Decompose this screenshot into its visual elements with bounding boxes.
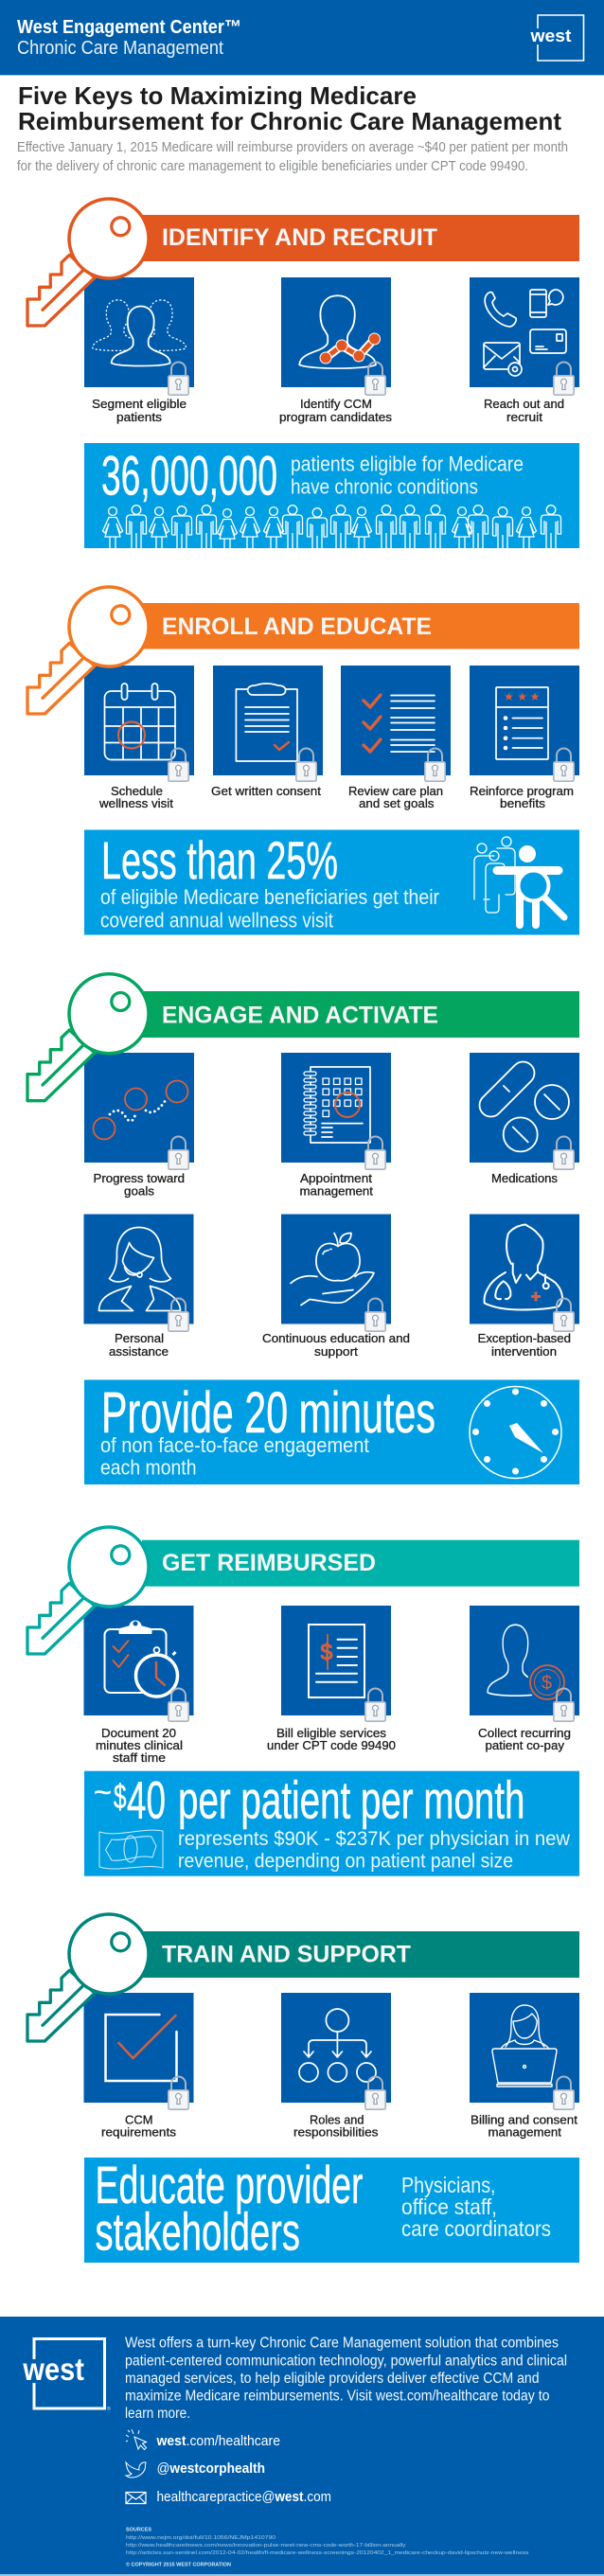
link: twitter: @westcorphealth xyxy=(157,2461,265,2477)
main title: Five Keys to Maximizing Medicare xyxy=(18,81,417,110)
icon: money bill xyxy=(99,1830,163,1869)
item labels: Continuous education and xyxy=(262,1331,410,1345)
west logo: west xyxy=(529,26,572,45)
stat callout: educate provider stakeholders: office staff, xyxy=(401,2194,497,2219)
icon: segment patients xyxy=(84,277,194,395)
icon: envelope xyxy=(126,2492,146,2503)
icon: woman at laptop xyxy=(470,1993,579,2109)
stat callout: 36,000,000: have chronic conditions xyxy=(291,475,478,498)
stat callout: 36,000,000: patients eligible for Medicare xyxy=(291,453,524,475)
footer west logo: west xyxy=(23,2352,84,2387)
item labels: Collect recurring xyxy=(478,1726,571,1740)
stat callout: provide 20 minutes xyxy=(84,1380,579,1484)
icon: appointment notebook xyxy=(281,1053,391,1169)
stat callout: less than 25%: covered annual wellness visit xyxy=(100,909,333,932)
item labels: Schedule xyxy=(111,784,163,798)
item labels: Segment eligible xyxy=(92,397,187,411)
item labels: wellness visit xyxy=(98,796,173,810)
section banner xyxy=(142,215,579,261)
item labels: benefits xyxy=(500,796,546,810)
item labels: Bill eligible services xyxy=(276,1726,387,1740)
sources: http://articles.sun-sentinel.com/2012-04-02/health/fl-medicare-wellness-screenings-20120402_1_medicare-checkup-david-lipschutz-new-wellness xyxy=(126,2550,529,2556)
icon: bill xyxy=(281,1606,391,1721)
item labels: responsibilities xyxy=(293,2124,379,2140)
item labels xyxy=(96,1726,571,1765)
stat callout: ~$40 per patient per month: 40 xyxy=(127,1770,166,1829)
stat callout: educate provider stakeholders: Physicians, xyxy=(401,2173,496,2197)
stat callout: 36,000,000: 36,000,000 xyxy=(101,445,277,507)
icon: program benefits sheet xyxy=(470,666,579,781)
link: website: west.com/healthcare xyxy=(156,2433,280,2449)
panel: get reimbursed xyxy=(27,1527,579,1876)
west logo xyxy=(529,15,583,61)
sources: http://www.nejm.org/doi/full/10.1056/NEJMp1410790 xyxy=(126,2535,275,2541)
item labels xyxy=(98,784,574,810)
sources: http://www.healthcareitnews.com/news/innovation-pulse-meet-new-cms-code-worth-17-billion-annually xyxy=(126,2543,406,2549)
item labels: support xyxy=(314,1344,358,1359)
people row xyxy=(102,506,560,551)
icon: org chart xyxy=(281,1993,391,2109)
icon: checkbox requirements xyxy=(83,1993,193,2109)
item labels: recruit xyxy=(506,410,542,424)
icon: twitter bird xyxy=(126,2462,146,2478)
section banner xyxy=(142,1540,579,1587)
item labels: CCM xyxy=(125,2113,153,2126)
key icon xyxy=(27,199,149,326)
stat callout: ~$40 per patient per month: ~ xyxy=(94,1777,112,1808)
item labels: Identify CCM xyxy=(300,397,372,411)
icon: reach out channels xyxy=(470,277,579,395)
item labels: management xyxy=(299,1183,373,1199)
panel: enroll and educate xyxy=(27,587,579,935)
item labels: Progress toward xyxy=(93,1171,185,1185)
section banner xyxy=(142,603,579,649)
panel: identify and recruit xyxy=(27,199,579,551)
item labels: assistance xyxy=(109,1344,169,1359)
stat callout: 36,000,000 xyxy=(84,443,579,551)
header title: West Engagement Center™ xyxy=(17,17,241,38)
key icon xyxy=(27,1527,149,1654)
footer paragraph: maximize Medicare reimbursements. Visit west.com/healthcare today to xyxy=(125,2388,549,2405)
stat callout: ~$40 per patient per month: $ xyxy=(114,1777,127,1816)
item labels: patients xyxy=(116,410,163,424)
intro text: Effective January 1, 2015 Medicare will reimburse providers on average ~$40 per patient per month xyxy=(17,140,568,155)
header band xyxy=(0,0,604,76)
link: email: healthcarepractice@west.com xyxy=(157,2489,331,2505)
item labels xyxy=(93,1171,571,1359)
footer west logo: ® xyxy=(107,2406,111,2412)
item labels: Medications xyxy=(491,1171,558,1185)
stat callout: educate provider stakeholders: Educate provider xyxy=(95,2155,364,2214)
stat callout: less than 25%: Less than 25% xyxy=(101,830,338,890)
item labels: staff time xyxy=(113,1750,166,1765)
icon: bill: $ xyxy=(320,1639,333,1665)
stat callout: less than 25%: of eligible Medicare beneficiaries get their xyxy=(100,885,439,909)
intro text xyxy=(17,140,568,174)
item labels: Roles and xyxy=(310,2113,364,2126)
footer paragraph: managed services, to help eligible providers deliver effective CCM and xyxy=(125,2371,540,2387)
key icon xyxy=(27,1914,149,2041)
stat callout: ~$40 per patient per month: represents $90K - $237K per physician in new xyxy=(178,1827,570,1850)
stat callout: less than 25% xyxy=(84,829,579,935)
icon: medications xyxy=(470,1053,579,1169)
footer west logo xyxy=(23,2338,111,2412)
panel: train and support xyxy=(27,1914,579,2263)
item labels: intervention xyxy=(491,1344,557,1359)
item labels: minutes clinical xyxy=(96,1738,183,1752)
icon: patient co-pay xyxy=(470,1606,579,1721)
footer paragraph: West offers a turn-key Chronic Care Management solution that combines xyxy=(125,2335,559,2352)
stat callout: provide 20 minutes: each month xyxy=(100,1456,197,1479)
header title: Chronic Care Management xyxy=(17,38,223,59)
icon: doctor xyxy=(470,1214,579,1331)
icon: apple in hand xyxy=(281,1214,391,1331)
section banner: ENGAGE AND ACTIVATE xyxy=(162,1002,438,1028)
section banner: ENROLL AND EDUCATE xyxy=(162,613,432,640)
item labels: requirements xyxy=(101,2124,177,2140)
header title xyxy=(17,17,241,59)
item labels: and set goals xyxy=(359,796,435,810)
icon: checklist xyxy=(341,666,451,781)
item labels: management xyxy=(489,2124,561,2140)
item labels: Reach out and xyxy=(484,397,564,411)
stat callout: provide 20 minutes: Provide 20 minutes xyxy=(101,1380,435,1445)
icon: calendar xyxy=(84,666,194,781)
icon: people under magnifier xyxy=(474,837,564,925)
panel: engage and activate xyxy=(27,974,579,1484)
sources xyxy=(126,2528,529,2567)
key icon xyxy=(27,587,149,714)
stat callout: educate provider stakeholders xyxy=(84,2155,579,2263)
footer paragraph: patient-centered communication technology, powerful analytics and clinical xyxy=(125,2353,567,2369)
section banner: GET REIMBURSED xyxy=(162,1550,376,1576)
item labels xyxy=(101,2113,577,2140)
main title: Reimbursement for Chronic Care Management xyxy=(18,107,561,135)
sources: SOURCES xyxy=(126,2528,151,2533)
item labels xyxy=(92,397,564,424)
footer paragraph: learn more. xyxy=(125,2406,190,2422)
icon: personal assistance xyxy=(83,1214,193,1331)
item labels: goals xyxy=(124,1183,155,1199)
main title xyxy=(18,81,561,135)
item labels: patient co-pay xyxy=(485,1738,565,1752)
item labels: Appointment xyxy=(300,1171,372,1185)
section banner xyxy=(142,1931,579,1978)
item labels: under CPT code 99490 xyxy=(267,1738,396,1752)
item labels: Document 20 xyxy=(101,1726,176,1740)
item labels: Review care plan xyxy=(348,784,443,798)
item labels: Personal xyxy=(115,1331,164,1345)
item labels: Exception-based xyxy=(477,1331,571,1345)
footer panel xyxy=(0,2317,604,2576)
icon: patient co-pay: $ xyxy=(542,1673,552,1694)
stat callout: educate provider stakeholders: care coordinators xyxy=(401,2216,551,2241)
section banner: TRAIN AND SUPPORT xyxy=(162,1942,411,1968)
icon: cursor click xyxy=(126,2429,146,2450)
sources: © COPYRIGHT 2015 WEST CORPORATION xyxy=(126,2562,231,2567)
item labels: Reinforce program xyxy=(470,784,574,798)
item labels: Get written consent xyxy=(211,784,321,798)
footer paragraph xyxy=(125,2335,567,2422)
stat callout: ~$40 per patient per month: revenue, depending on patient panel size xyxy=(178,1850,513,1873)
stat callout: ~$40 per patient per month xyxy=(84,1770,579,1876)
stat callout: educate provider stakeholders: stakeholders xyxy=(95,2202,300,2261)
icon: identify candidates xyxy=(281,277,391,395)
item labels: program candidates xyxy=(279,410,393,424)
intro text: for the delivery of chronic care management to eligible beneficiaries under CPT code 99490. xyxy=(17,159,528,174)
key icon xyxy=(27,974,149,1101)
icon: progress toward goals xyxy=(84,1053,194,1169)
icon: clock xyxy=(470,1386,561,1479)
section banner: IDENTIFY AND RECRUIT xyxy=(162,224,437,251)
icon: document clinical time xyxy=(83,1606,193,1721)
icon: clipboard consent xyxy=(213,666,323,781)
stat callout: provide 20 minutes: of non face-to-face engagement xyxy=(100,1433,369,1457)
item labels: Billing and consent xyxy=(471,2113,577,2126)
section banner xyxy=(142,991,579,1038)
